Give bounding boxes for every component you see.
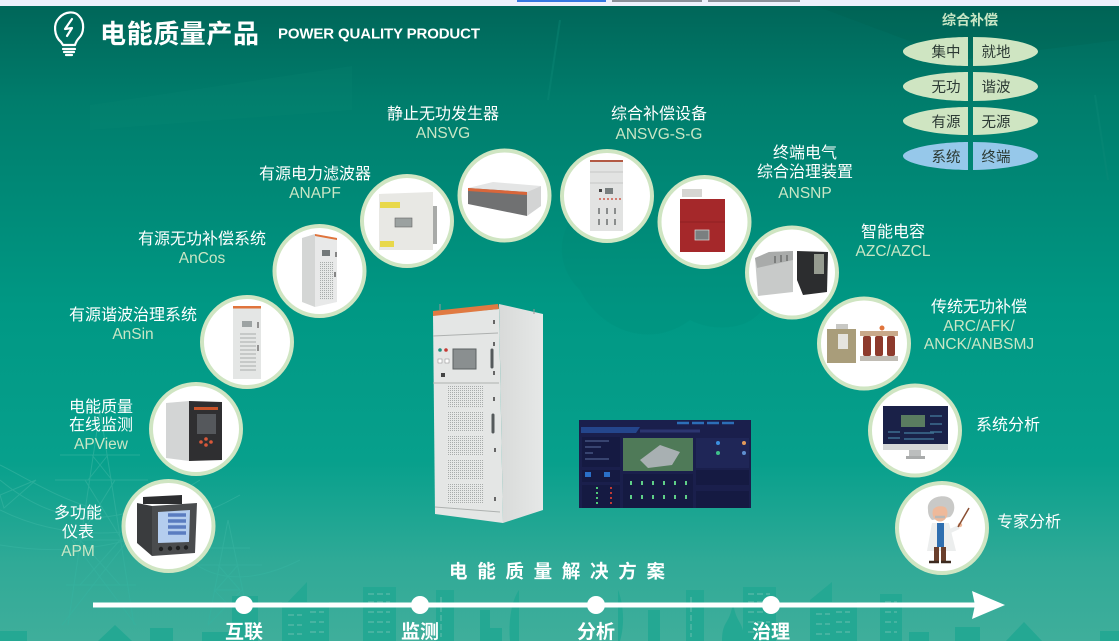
label: 传统无功补偿 ARC/AFK/ANCK/ANBSMJ: ARC/AFK/ bbox=[943, 318, 1015, 335]
city skyline background bbox=[0, 582, 1119, 641]
label: 传统无功补偿 ARC/AFK/ANCK/ANBSMJ bbox=[924, 298, 1034, 353]
label: 有源谐波治理系统 AnSin bbox=[69, 306, 197, 343]
label: 静止无功发生器 ANSVG bbox=[387, 105, 499, 142]
title icon: light bulb bbox=[55, 12, 83, 55]
step: 互联 bbox=[225, 596, 263, 641]
label: 综合补偿设备 ANSVG-S-G: 综合补偿设备 bbox=[611, 105, 707, 123]
product: ANSVG-S-G cabinet bbox=[562, 151, 652, 241]
product: ANSVG rack bbox=[460, 150, 550, 240]
label: 综合补偿设备 ANSVG-S-G bbox=[611, 105, 707, 143]
label: 多功能仪表 APM: 仪表 bbox=[62, 523, 94, 541]
title: 电能质量产品 bbox=[100, 19, 259, 49]
label: 传统无功补偿 ARC/AFK/ANCK/ANBSMJ: ANCK/ANBSMJ bbox=[924, 336, 1034, 353]
label: 终端电气综合治理装置 ANSNP: 终端电气 bbox=[773, 144, 837, 162]
label: 电能质量在线监测 APView: 电能质量 bbox=[69, 398, 133, 416]
power towers background bbox=[0, 410, 300, 625]
product: system monitor bbox=[870, 386, 960, 476]
label: 终端电气综合治理装置 ANSNP bbox=[757, 144, 853, 202]
label: 传统无功补偿 ARC/AFK/ANCK/ANBSMJ: 传统无功补偿 bbox=[931, 298, 1027, 316]
legend row 2 bbox=[903, 72, 1038, 101]
label: 有源谐波治理系统 AnSin: 有源谐波治理系统 bbox=[69, 306, 197, 324]
subtitle: POWER QUALITY PRODUCT bbox=[278, 26, 480, 42]
legend row 1: 就地 bbox=[982, 44, 1010, 61]
label: 有源无功补偿系统 AnCos bbox=[138, 230, 266, 267]
legend heading: 综合补偿 bbox=[942, 12, 998, 28]
label: 智能电容 AZC/AZCL: AZC/AZCL bbox=[856, 243, 931, 260]
legend row 1: 集中 bbox=[932, 44, 960, 61]
label: 静止无功发生器 ANSVG: ANSVG bbox=[416, 125, 470, 142]
legend row 2: 无功 bbox=[932, 79, 960, 96]
top browser strip bbox=[0, 0, 1119, 6]
label: 智能电容 AZC/AZCL: 智能电容 bbox=[861, 223, 925, 241]
legend row 2: 谐波 bbox=[982, 79, 1011, 96]
label: 终端电气综合治理装置 ANSNP: 综合治理装置 bbox=[757, 163, 853, 181]
label: 有源电力滤波器 ANAPF: ANAPF bbox=[289, 185, 341, 202]
label: 有源无功补偿系统 AnCos: 有源无功补偿系统 bbox=[138, 230, 266, 248]
label: 系统分析: 系统分析 bbox=[976, 416, 1040, 434]
legend row 1 bbox=[903, 37, 1038, 66]
label: 多功能仪表 APM: 多功能 bbox=[54, 504, 102, 522]
label: 有源电力滤波器 ANAPF bbox=[259, 165, 371, 202]
legend row 4: 系统 bbox=[932, 149, 960, 166]
central dashboard screenshot bbox=[579, 420, 751, 508]
step: 治理 bbox=[752, 596, 790, 641]
label: 电能质量在线监测 APView: APView bbox=[74, 436, 129, 453]
label: 多功能仪表 APM bbox=[54, 504, 102, 560]
label: 电能质量在线监测 APView: 在线监测 bbox=[69, 416, 133, 434]
legend row 3: 无源 bbox=[982, 114, 1011, 131]
section heading: 电能质量解决方案 bbox=[449, 561, 665, 582]
label: 终端电气综合治理装置 ANSNP: ANSNP bbox=[778, 185, 832, 202]
legend row 3: 有源 bbox=[932, 114, 961, 131]
product: expert scientist bbox=[897, 483, 987, 573]
legend row 4: 终端 bbox=[982, 149, 1010, 166]
legend row 3 bbox=[903, 107, 1038, 135]
product: ANAPF wall unit bbox=[362, 176, 452, 266]
product: ARC capacitor and reactor bbox=[819, 298, 909, 388]
label: 专家分析: 专家分析 bbox=[997, 513, 1061, 531]
product: APM meter bbox=[124, 481, 214, 571]
product: AZC capacitor bbox=[747, 228, 837, 318]
step: 监测 bbox=[401, 596, 439, 641]
timeline arrow bbox=[93, 591, 1005, 619]
label: 有源谐波治理系统 AnSin: AnSin bbox=[112, 326, 154, 343]
label: 智能电容 AZC/AZCL bbox=[856, 223, 931, 260]
legend row 4 bbox=[903, 142, 1038, 170]
step: 分析 bbox=[577, 596, 615, 641]
product: ANSNP red unit bbox=[660, 177, 750, 267]
label: 综合补偿设备 ANSVG-S-G: ANSVG-S-G bbox=[616, 126, 702, 143]
product: APView monitor bbox=[151, 384, 241, 474]
label: 多功能仪表 APM: APM bbox=[61, 543, 95, 560]
label: 有源电力滤波器 ANAPF: 有源电力滤波器 bbox=[259, 165, 371, 183]
product: AnSin cabinet bbox=[202, 297, 292, 387]
label: 电能质量在线监测 APView bbox=[69, 398, 133, 453]
label: 有源无功补偿系统 AnCos: AnCos bbox=[179, 250, 226, 267]
central cabinet bbox=[433, 304, 543, 523]
panel: compensation legend bbox=[903, 12, 1038, 170]
product: AnCos cabinet bbox=[274, 226, 364, 316]
label: 静止无功发生器 ANSVG: 静止无功发生器 bbox=[387, 105, 499, 123]
